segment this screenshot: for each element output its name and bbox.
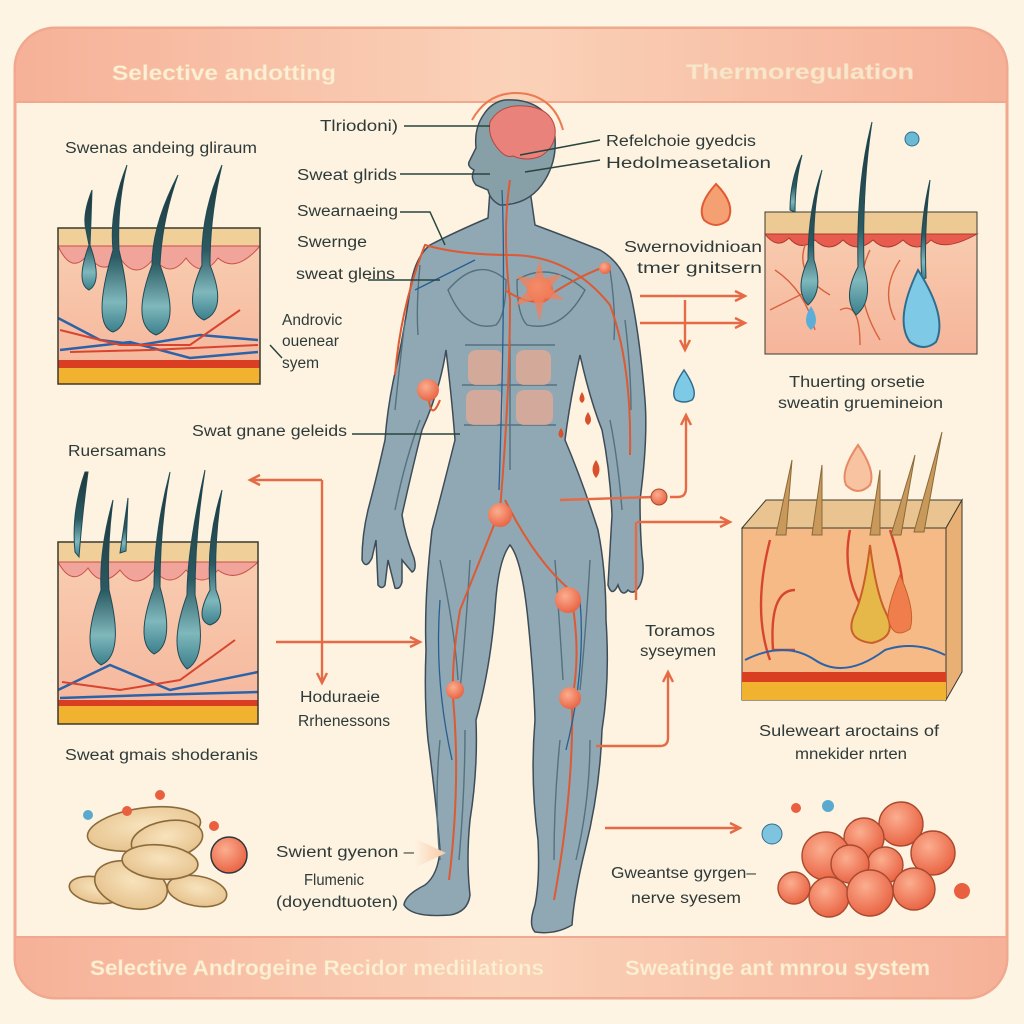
label: nerve system: nerve syesem: [631, 890, 741, 907]
arrow: node: [670, 415, 691, 497]
label: thuerting: Thuerting orsetie: [789, 374, 925, 391]
skin block: mid right: [742, 432, 962, 700]
hair and gland: [82, 165, 222, 335]
arrows: [250, 291, 745, 833]
icon: bean cluster: [67, 800, 229, 917]
label: hedoul: Hedolmeasetalion: [606, 155, 771, 172]
icon: blue bubble: [905, 132, 919, 146]
arrow: to top right 2: [640, 318, 745, 328]
human body figure: [362, 93, 646, 933]
droplets beside body: [558, 392, 600, 478]
label: sweat gleins: sweat gleins: [296, 266, 395, 283]
label: sweat grane: Swat gnane geleids: [192, 423, 347, 440]
right upper labels: [606, 133, 943, 907]
label: reflex: Refelchoie gyedcis: [606, 133, 756, 150]
arrow: to top right 1: [640, 291, 745, 301]
bubbles: [762, 800, 970, 899]
skin panel: mid left: [58, 470, 258, 724]
skin panel: top left: [58, 165, 260, 384]
label: rhemasons: Rrhenessons: [298, 713, 390, 730]
label: swarmaeing: Swearnaeing: [297, 203, 398, 220]
arrow: from body to node: [560, 497, 654, 500]
label: mnekilder: mnekider nrten: [795, 746, 907, 763]
arrow: back left: [250, 475, 327, 683]
node on arrow: [651, 489, 667, 505]
label: autonomic system: ouenear: [282, 333, 339, 350]
nerves and vessels: [395, 180, 630, 900]
head: [469, 100, 555, 205]
burst at chest: [514, 260, 564, 322]
header band: [15, 28, 1007, 102]
footer left: Selective Androgeine Recidor mediilations: [90, 957, 544, 980]
label: sudewater: Suleweart aroctains of: [759, 723, 940, 740]
glowing nodes: [417, 262, 611, 709]
icon: flame drop: [702, 184, 730, 225]
label: hodurage: Hoduraeie: [300, 689, 380, 706]
icon: gradient arrowhead: [414, 838, 446, 868]
footer band: [15, 937, 1007, 998]
arrow: lift: [680, 300, 690, 350]
label: autonomic system: [282, 312, 343, 372]
header left: Selective andotting: [112, 62, 336, 85]
label: mid left title: Ruersamans: [68, 443, 166, 460]
arrow: panel left to body: [276, 637, 420, 647]
label: thalamus: Tlriodoni): [320, 118, 398, 135]
label: sweat glands 1: Sweat glrids: [297, 167, 397, 184]
label: top left panel title: Swenas andeing gliraum: [65, 140, 257, 157]
leader lines: [270, 126, 600, 434]
label: timer: tmer gnitsern: [637, 260, 762, 277]
arrow: to right block: [636, 517, 730, 600]
label: sweatnse: Gweantse gyrgen–: [611, 865, 756, 882]
arrow: bottom: [605, 823, 740, 833]
left labels: [192, 118, 398, 730]
label: sweat gland pointer: Swient gyenon –: [276, 844, 414, 861]
abdominal muscles: [466, 350, 553, 425]
body silhouette: [362, 190, 646, 933]
label: sweat innovation: Swernovidnioan: [624, 239, 762, 256]
skin panel: top right: [765, 122, 977, 354]
icon: red spheres cluster: [778, 802, 955, 917]
halo arc: [472, 93, 563, 130]
label: sweat gland pointer: [276, 844, 414, 911]
header right: Thermoregulation: [686, 61, 914, 84]
label: mid left caption: Sweat gmais shoderanis: [65, 747, 258, 764]
icon: heat drop: [844, 445, 872, 491]
label: sweatin: sweatin gruemineion: [778, 395, 943, 412]
footer right: Sweatinge ant mnrou system: [625, 957, 930, 980]
label: syseymen: syseymen: [640, 643, 716, 660]
label: sweat gland pointer: (doyendtuoten): [276, 894, 398, 911]
label: swemge: Swernge: [297, 234, 367, 251]
icon: water drop: [674, 370, 694, 402]
label: autonomic system: Androvic: [282, 312, 343, 329]
label: toramos: Toramos: [645, 623, 715, 640]
muscle lines: [395, 265, 631, 860]
label: sweat gland pointer: Flumenic: [304, 872, 364, 889]
arrow: lower: [596, 672, 673, 746]
label: autonomic system: syem: [282, 355, 319, 372]
brain: [489, 106, 555, 159]
icon: receptor ball with particles: [83, 790, 247, 873]
